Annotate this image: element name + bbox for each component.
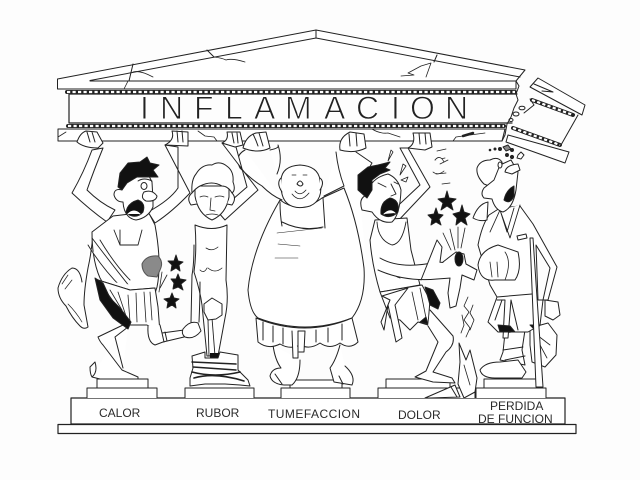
burn smoke — [142, 256, 162, 277]
fig leaf — [204, 298, 222, 320]
mouth — [381, 198, 398, 217]
head — [114, 172, 153, 220]
falling rubble — [489, 145, 524, 159]
belly — [248, 188, 364, 327]
raised arm — [388, 148, 430, 222]
hair curls — [477, 158, 504, 188]
torso — [92, 212, 159, 322]
temple pediment roof — [58, 30, 525, 89]
bent leg — [530, 323, 557, 367]
label: tumefaccion: TUMEFACCION — [268, 407, 360, 421]
pedestals — [87, 379, 546, 398]
head — [361, 174, 401, 222]
hands — [77, 131, 103, 148]
figure: dolor man — [356, 133, 477, 398]
skirt — [380, 285, 430, 330]
skirt — [256, 318, 358, 347]
broken edge and rubble — [502, 81, 534, 141]
torso and legs — [194, 225, 227, 356]
black gap — [210, 353, 219, 360]
head — [195, 186, 229, 220]
label: calor: CALOR — [99, 406, 141, 420]
label: rubor: RUBOR — [196, 406, 240, 420]
right hand — [340, 132, 366, 152]
title: INFLAMACION: INFLAMACION — [140, 90, 468, 126]
frieze with title — [67, 90, 517, 126]
nose — [505, 164, 520, 174]
label: perdida de funcion: PERDIDA — [490, 399, 543, 413]
sling — [478, 245, 519, 280]
arms and shoulders — [238, 145, 368, 260]
broken entablature fragment — [506, 78, 585, 163]
mouth — [504, 186, 514, 202]
black parts — [498, 325, 540, 332]
legs and feet — [270, 345, 353, 385]
arm across — [378, 258, 451, 280]
left hand — [243, 132, 270, 151]
hair — [192, 163, 234, 193]
pain squiggles — [461, 297, 474, 337]
rays — [443, 227, 465, 250]
hair — [358, 162, 390, 198]
hand — [222, 132, 243, 147]
hand — [408, 133, 432, 150]
figure: calor man — [58, 131, 201, 379]
standing leg — [415, 310, 455, 383]
arm — [218, 143, 258, 220]
lower cornice — [58, 129, 505, 141]
label: dolor: DOLOR — [398, 408, 441, 422]
crutch — [517, 234, 543, 387]
stars — [168, 255, 183, 271]
black shadow — [95, 278, 131, 329]
standing leg and foot — [90, 325, 138, 379]
wound — [455, 252, 463, 266]
base plinth with labels — [58, 398, 576, 434]
dropped cloth — [190, 352, 250, 386]
arms — [72, 148, 115, 222]
belt — [495, 294, 532, 338]
boot — [480, 360, 526, 378]
robe torso — [478, 206, 557, 332]
left arm — [356, 152, 372, 180]
stars — [438, 191, 456, 210]
head — [281, 165, 321, 208]
hair — [118, 157, 159, 190]
torch — [425, 385, 460, 398]
belt ties — [381, 288, 408, 342]
mouth — [126, 200, 144, 216]
head — [482, 160, 518, 212]
hanging arm — [191, 245, 200, 322]
figure: tumefaccion fat man — [238, 132, 368, 385]
singlet torso — [370, 218, 420, 292]
figure: rubor thin man — [189, 132, 258, 386]
figure: perdida de funcion man — [473, 158, 560, 387]
skirt — [98, 280, 160, 333]
leaf — [473, 202, 488, 221]
raised foot and thigh — [58, 232, 93, 328]
thigh and club — [148, 325, 184, 345]
raised leg and foot — [421, 240, 477, 308]
label: perdida de funcion: DE FUNCION — [478, 412, 553, 426]
flame — [458, 343, 477, 398]
hand — [545, 300, 560, 320]
standing leg — [500, 330, 525, 365]
motion marks — [388, 149, 450, 184]
